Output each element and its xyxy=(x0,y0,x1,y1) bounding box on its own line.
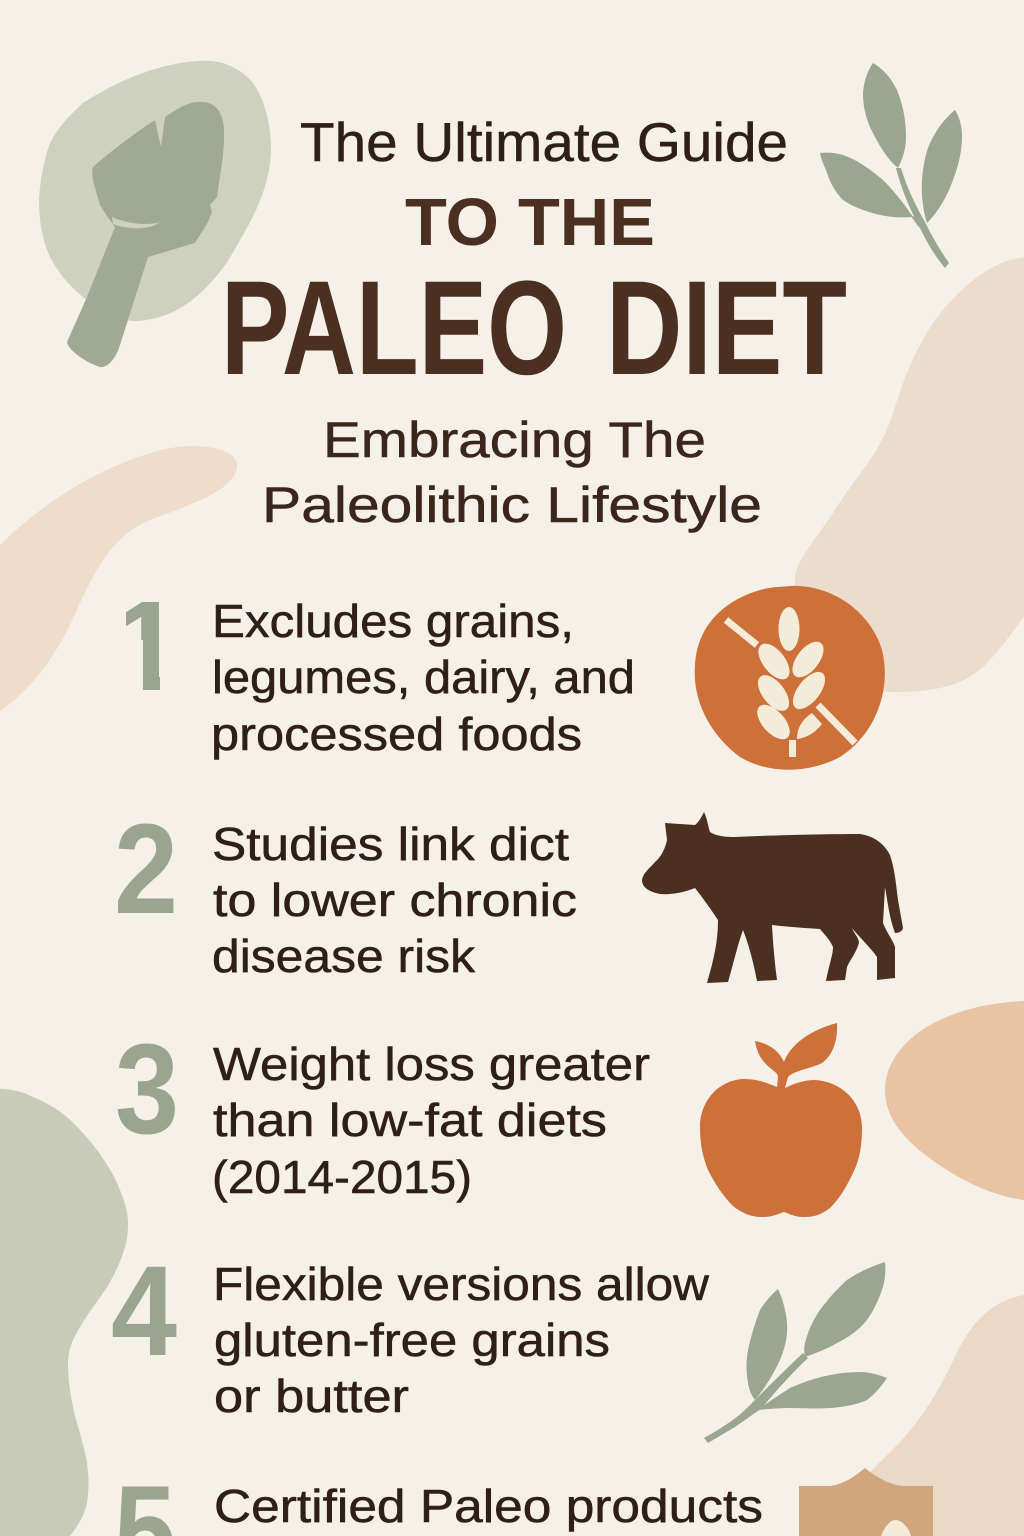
item 5 text: Certified Paleo products xyxy=(214,1480,763,1532)
background blob: lower right peach xyxy=(885,1001,1024,1200)
icon: top right leaf sprig xyxy=(820,63,962,268)
number 1: 1 xyxy=(111,575,183,718)
icon: spoon on sage blob xyxy=(39,61,271,367)
subtitle xyxy=(262,412,762,533)
item 3 text: than low-fat diets xyxy=(213,1094,607,1146)
item 1 xyxy=(111,575,885,770)
background blob: left sage xyxy=(0,1089,128,1536)
icon: crossed-out wheat xyxy=(695,586,885,770)
item 4 text: gluten-free grains xyxy=(214,1314,610,1366)
item 4 xyxy=(111,1240,887,1443)
item 2 text: disease risk xyxy=(212,930,476,982)
item 3 text: Weight loss greater xyxy=(213,1038,650,1090)
item 1 text: Excludes grains, xyxy=(212,595,574,647)
number 2: 2 xyxy=(114,798,178,941)
icon: lower leaf sprig xyxy=(704,1262,887,1443)
title line 1: The Ultimate Guide xyxy=(300,111,788,173)
wheat grains and stem xyxy=(751,607,831,757)
icon: certification badge xyxy=(799,1468,933,1536)
icon: cow silhouette xyxy=(642,812,903,983)
orange circle xyxy=(695,586,885,770)
title line 3: DIET xyxy=(606,254,847,403)
item 2 text: to lower chronic xyxy=(213,874,577,926)
item 1 text: legumes, dairy, and xyxy=(212,651,635,703)
title xyxy=(221,111,847,403)
item 4 text: Flexible versions allow xyxy=(213,1258,710,1310)
number 4: 4 xyxy=(111,1240,177,1383)
title line 2: TO THE xyxy=(405,185,655,260)
background blob: left peach xyxy=(0,446,237,711)
subtitle line 2: Paleolithic Lifestyle xyxy=(262,477,762,533)
item 3 xyxy=(115,1018,862,1217)
number 3: 3 xyxy=(115,1018,179,1161)
badge shield xyxy=(799,1468,933,1536)
subtitle line 1: Embracing The xyxy=(323,412,706,468)
item 3 text: (2014-2015) xyxy=(212,1151,472,1203)
icon: apple xyxy=(700,1023,862,1217)
item 2 text: Studies link dict xyxy=(212,818,569,870)
item 1 text: processed foods xyxy=(211,708,582,760)
item 5 xyxy=(114,1460,933,1536)
item 4 text: or butter xyxy=(214,1370,409,1422)
crossing slash xyxy=(726,620,855,743)
background blob: top right beige xyxy=(795,257,1024,692)
title line 3: PALEO xyxy=(221,254,567,403)
spoon shape xyxy=(67,102,224,367)
badge inner arch xyxy=(881,1520,911,1536)
item 2 xyxy=(114,798,903,983)
spoon highlight xyxy=(112,217,160,228)
background blob: bottom right beige xyxy=(825,1295,1024,1536)
sage blob behind spoon xyxy=(39,61,271,321)
